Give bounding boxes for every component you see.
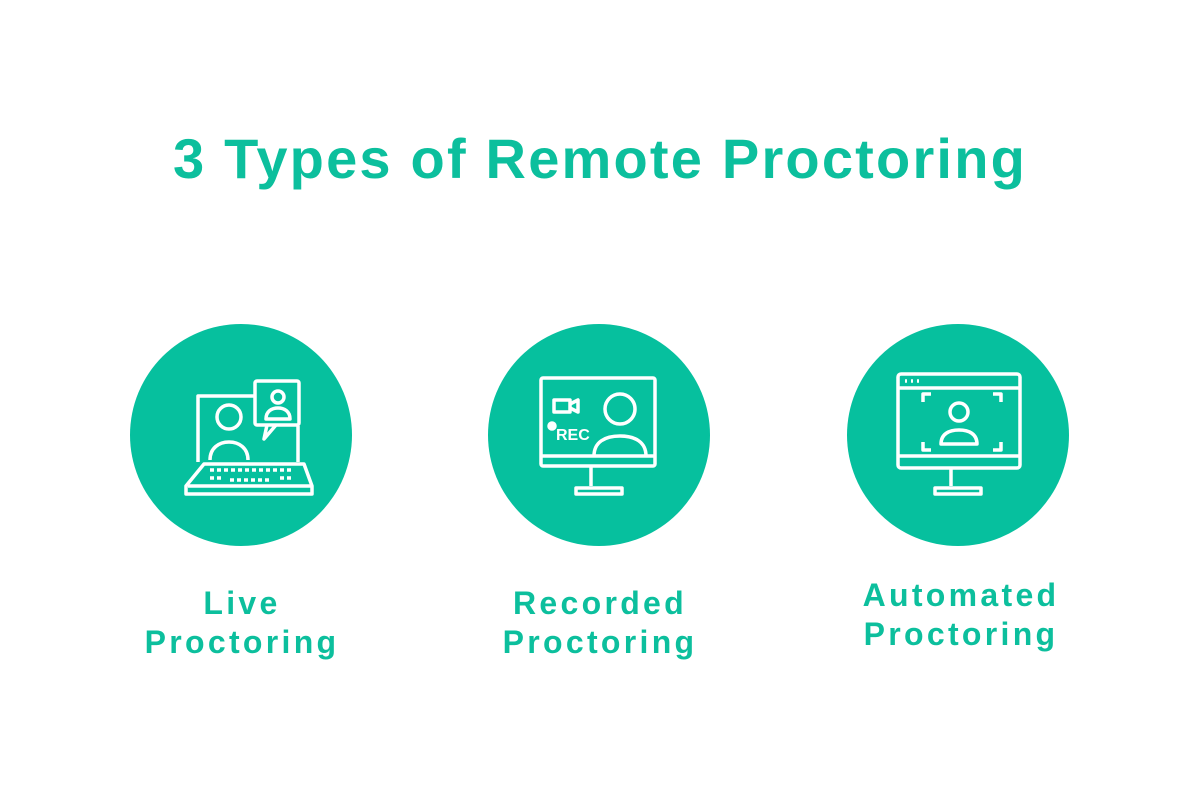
label: automated: Proctoring [864, 616, 1058, 652]
label: recorded: Recorded [513, 585, 687, 621]
label: automated [863, 577, 1059, 652]
title: 3 Types of Remote Proctoring [173, 127, 1027, 190]
icon: automated proctoring [847, 324, 1069, 546]
label: live: Proctoring [145, 624, 339, 660]
label: live [145, 585, 339, 660]
label: live: Live [203, 585, 281, 621]
icon: live proctoring [130, 324, 352, 546]
label: recorded [503, 585, 697, 660]
icon: recorded proctoring [488, 324, 710, 546]
label: recorded: Proctoring [503, 624, 697, 660]
label: automated: Automated [863, 577, 1059, 613]
icon: recorded proctoring: REC [556, 427, 590, 444]
